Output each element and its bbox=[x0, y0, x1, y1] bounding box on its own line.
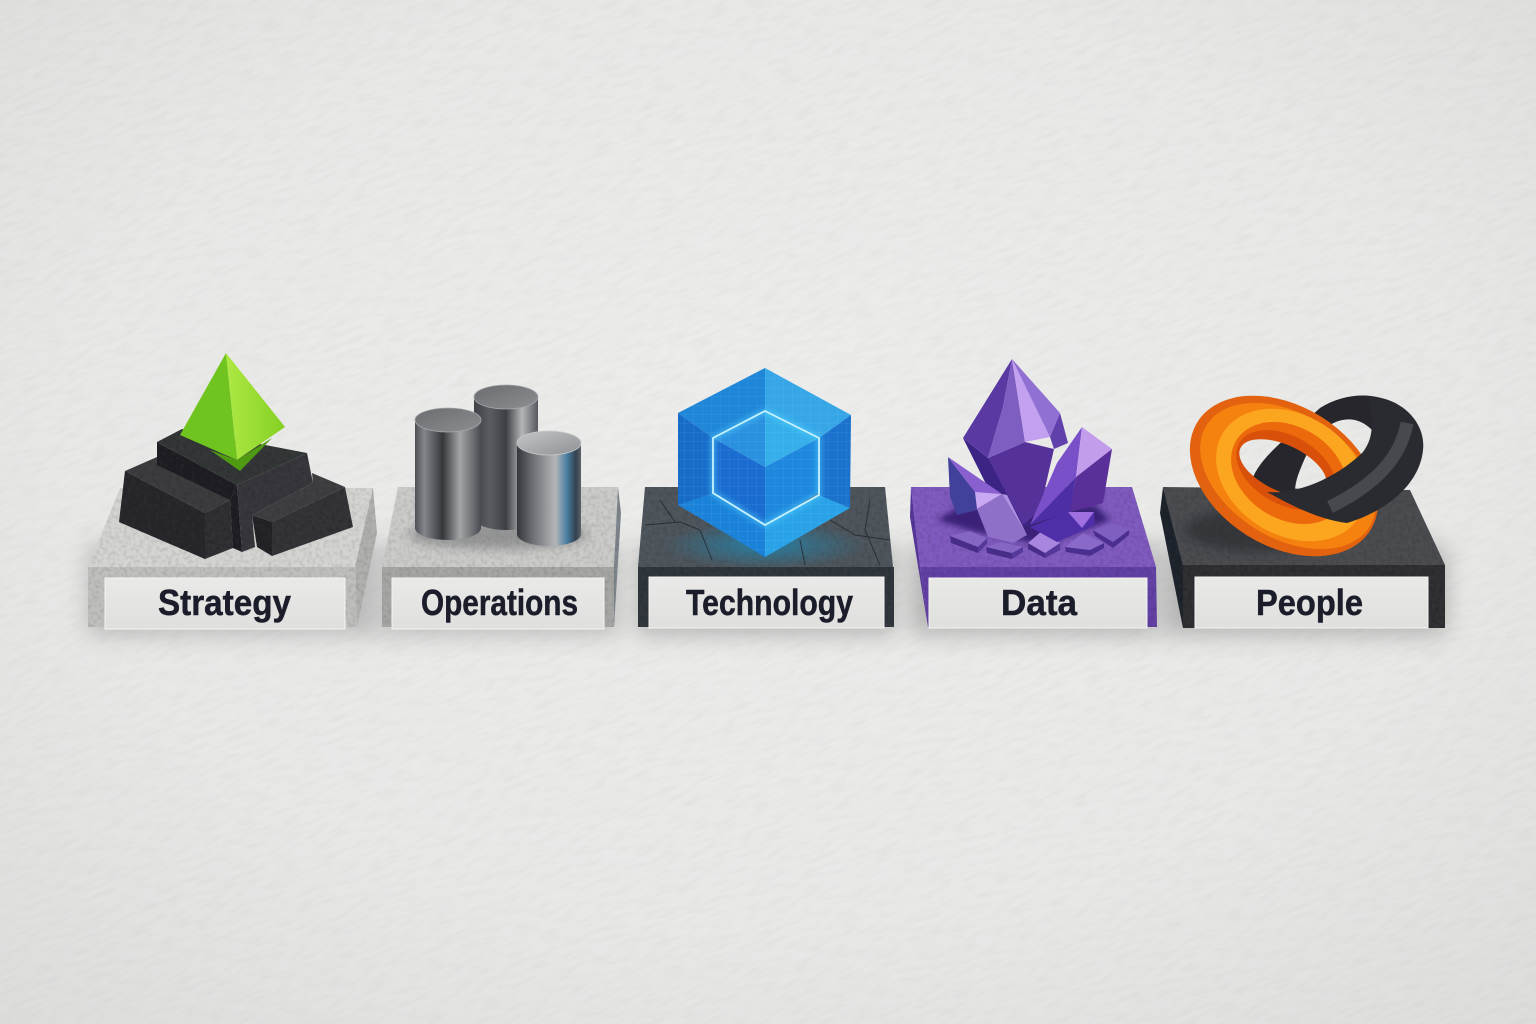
crystal shards bbox=[950, 523, 1129, 559]
cyan floor glow bbox=[665, 521, 865, 569]
ring shadow on plinth bbox=[1185, 508, 1335, 552]
orange ring bbox=[1190, 396, 1378, 556]
cracked slate plinth bbox=[638, 487, 894, 627]
label: operations: Operations bbox=[421, 582, 578, 623]
steel cylinders bbox=[415, 385, 581, 546]
label: people bbox=[1195, 577, 1428, 628]
black ring front bbox=[1267, 396, 1423, 523]
panel: strategy bbox=[88, 353, 377, 629]
label: technology bbox=[649, 577, 884, 628]
soft shadows beneath plinths bbox=[88, 545, 1446, 635]
purple crystals bbox=[937, 359, 1129, 559]
dark stone plinth bbox=[1160, 487, 1445, 628]
panel: people bbox=[1160, 396, 1445, 628]
surface cracks bbox=[645, 500, 890, 565]
green pyramid bbox=[180, 353, 285, 471]
label: people: People bbox=[1256, 582, 1363, 623]
interlinked rings bbox=[1190, 396, 1424, 556]
black ring back bbox=[1250, 395, 1380, 495]
panel: technology bbox=[638, 368, 894, 628]
concrete plinth bbox=[382, 487, 621, 627]
panel: operations bbox=[382, 385, 621, 629]
label: operations bbox=[392, 578, 604, 629]
right crystal bbox=[1030, 427, 1112, 542]
crystal base shadow bbox=[937, 505, 1110, 545]
label: data: Data bbox=[1001, 582, 1078, 623]
left crystal bbox=[948, 457, 1027, 543]
concrete plinth bbox=[88, 488, 377, 627]
label: technology: Technology bbox=[686, 582, 853, 623]
label: data bbox=[929, 578, 1147, 628]
label: strategy bbox=[105, 578, 345, 629]
shadow below cylinders bbox=[408, 521, 588, 549]
central crystal bbox=[963, 359, 1068, 530]
black stepped blocks bbox=[119, 429, 353, 559]
purple plinth bbox=[910, 487, 1157, 627]
label: strategy: Strategy bbox=[158, 582, 291, 623]
panel: data bbox=[910, 359, 1157, 628]
blue cube bbox=[678, 368, 851, 557]
